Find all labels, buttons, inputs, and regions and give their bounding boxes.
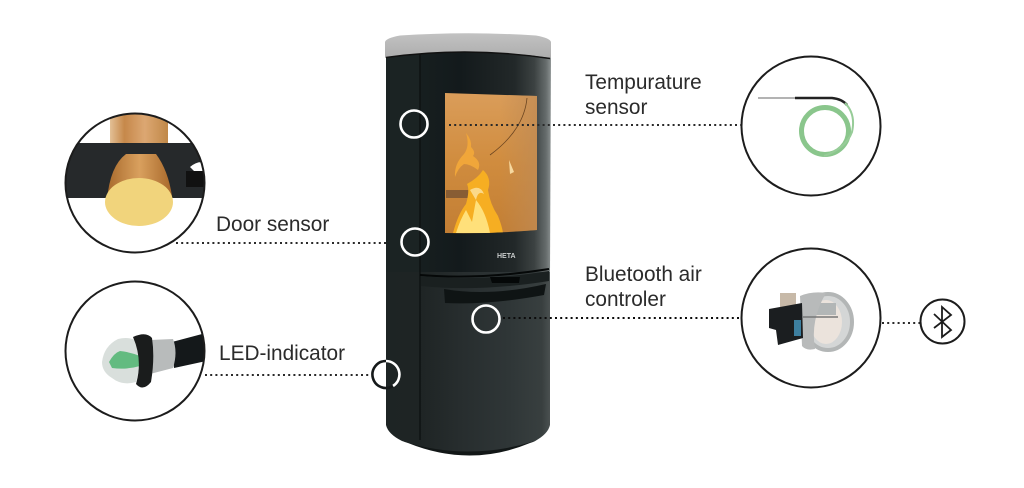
temperature sensor image circle bbox=[742, 56, 880, 196]
leader: bluetooth bbox=[882, 322, 920, 324]
thread bbox=[150, 339, 176, 374]
lens bbox=[102, 338, 140, 383]
top bracket bbox=[780, 293, 796, 309]
top door lower trim bbox=[420, 269, 549, 277]
bracket shade bbox=[186, 171, 204, 187]
handle bbox=[490, 277, 520, 283]
ring: temperature bbox=[400, 110, 428, 138]
stove lower base bbox=[390, 425, 546, 456]
brand label: HETA bbox=[497, 253, 516, 260]
stove lower body bbox=[386, 270, 550, 452]
damper ring bbox=[804, 294, 852, 350]
LED green bbox=[109, 351, 140, 369]
nut bbox=[133, 334, 153, 388]
flame inner bbox=[456, 200, 490, 233]
stove upper glass body bbox=[386, 50, 551, 272]
plunger end bbox=[105, 178, 173, 226]
probe handle bbox=[795, 98, 847, 105]
LED indicator image circle bbox=[66, 282, 206, 420]
label: LED indicator: LED-indicator bbox=[219, 342, 345, 365]
ring: air bbox=[472, 306, 500, 332]
black bracket bbox=[60, 143, 210, 198]
stove bbox=[372, 33, 551, 456]
ash door recess bbox=[444, 284, 546, 303]
label: bluetooth air controller: controler bbox=[585, 288, 666, 311]
flame white streaks bbox=[470, 188, 484, 200]
damper inner bbox=[810, 300, 842, 344]
leader: temperature bbox=[449, 124, 741, 126]
handle shelf bbox=[421, 271, 549, 288]
actuator label bbox=[794, 320, 801, 336]
window right panel bbox=[511, 95, 537, 232]
actuator bbox=[769, 303, 803, 345]
label: temperature sensor: sensor bbox=[585, 96, 647, 119]
bracket hole bbox=[190, 162, 202, 171]
green coil bbox=[802, 108, 848, 154]
spark bbox=[509, 160, 514, 174]
flames main bbox=[453, 170, 503, 233]
label: bluetooth air controller: Bluetooth air bbox=[585, 263, 702, 286]
probe bbox=[758, 97, 795, 99]
fire window bbox=[445, 93, 537, 233]
firebrick bbox=[446, 190, 468, 198]
baffle wire bbox=[490, 98, 527, 155]
air controller image circle bbox=[742, 248, 880, 388]
coil strand bbox=[824, 103, 853, 156]
stone lower edge bbox=[386, 52, 550, 58]
ring: door bbox=[402, 228, 428, 256]
label: door sensor: Door sensor bbox=[216, 213, 329, 236]
side panel bbox=[386, 50, 420, 272]
bluetooth icon bbox=[920, 300, 964, 344]
stone top bbox=[385, 33, 551, 58]
label: temperature sensor: Tempurature bbox=[585, 71, 702, 94]
flame tongue bbox=[455, 133, 479, 177]
duct bbox=[800, 292, 826, 350]
copper rod bbox=[110, 114, 168, 143]
ring: LED bbox=[372, 361, 399, 388]
cable bbox=[174, 334, 204, 368]
plunger side bbox=[108, 154, 172, 196]
door seam bbox=[419, 54, 421, 440]
leader: LED bbox=[205, 374, 372, 376]
door sensor image circle bbox=[60, 112, 210, 252]
leader: air bbox=[503, 317, 741, 319]
damper blade bbox=[810, 303, 836, 315]
spindle bbox=[803, 316, 838, 318]
leader: door bbox=[176, 242, 386, 244]
